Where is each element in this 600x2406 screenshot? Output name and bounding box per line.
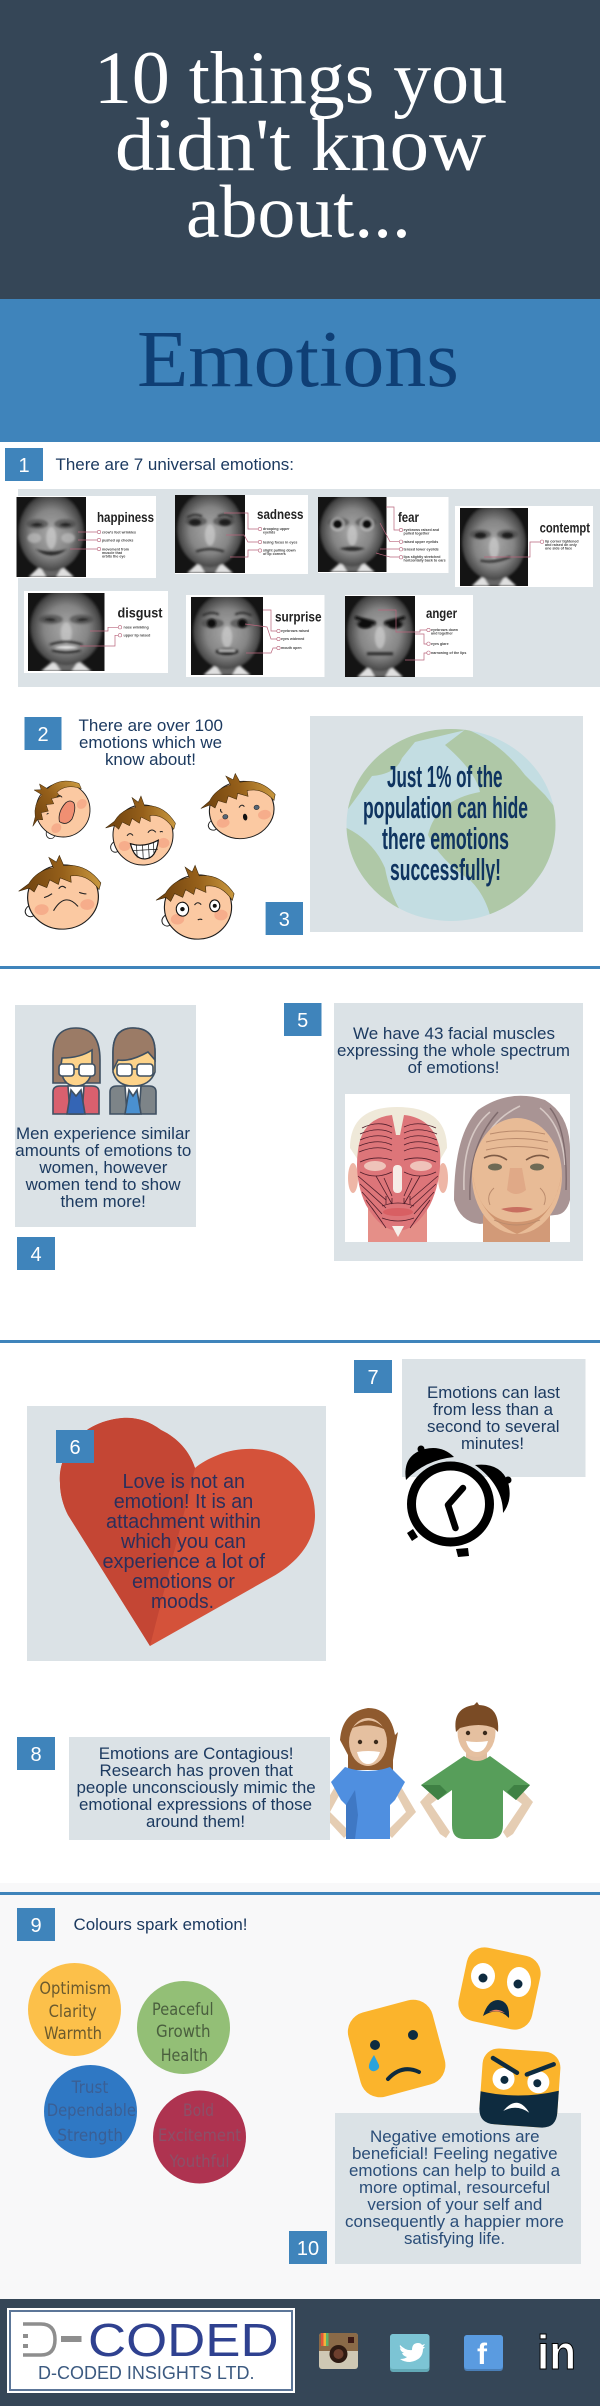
text: over 100 emotions: emotions which we bbox=[79, 733, 222, 752]
panel: love is not an emotion bbox=[27, 1406, 326, 1661]
text: negative emotions: satisfying life. bbox=[404, 2229, 505, 2248]
circle: red bbox=[153, 2090, 246, 2184]
icon: grinning boy bbox=[104, 794, 178, 867]
text: facial muscles bbox=[337, 1024, 570, 1077]
section 1: universal emotions bbox=[5, 448, 600, 687]
panel: negative emotions bbox=[335, 2113, 581, 2264]
card: sadness bbox=[175, 491, 308, 574]
card: fear: pulled together bbox=[404, 532, 430, 536]
text: duration: from less than a bbox=[433, 1400, 554, 1419]
icon: D mark bbox=[23, 2324, 82, 2355]
text: men and women: them more! bbox=[60, 1192, 146, 1211]
text: duration: second to several bbox=[427, 1417, 560, 1436]
card: fear: eyebrows raised and bbox=[404, 528, 439, 532]
number badge 10 bbox=[289, 2231, 327, 2264]
card: disgust: nose wrinkling bbox=[124, 626, 149, 630]
card: happiness: muscle that bbox=[102, 551, 123, 555]
text: love bbox=[102, 1471, 265, 1613]
icon: globe bbox=[346, 729, 556, 921]
text: love: Love is not an bbox=[122, 1471, 245, 1493]
card: fear: fear bbox=[398, 509, 419, 525]
circle: yellow: Clarity bbox=[49, 2002, 97, 2022]
title: 10 things you didn't know about: 10 things you bbox=[94, 37, 507, 120]
section 3: hide emotions bbox=[266, 715, 583, 935]
title: 10 things you didn't know about bbox=[94, 37, 507, 254]
text: love: moods. bbox=[151, 1591, 214, 1613]
number badge 10: 10 bbox=[297, 2238, 319, 2260]
number badge 8 bbox=[17, 1737, 55, 1770]
text: love: which you can bbox=[120, 1531, 246, 1553]
circle: green bbox=[137, 1981, 230, 2074]
card: anger bbox=[345, 592, 473, 677]
card: happiness: happiness bbox=[97, 509, 154, 525]
header: title band bbox=[0, 0, 600, 299]
footer bbox=[0, 2299, 600, 2406]
text: negative emotions: more optimal, resourceful bbox=[359, 2178, 550, 2197]
icon: linkedin: in bbox=[537, 2327, 576, 2380]
logo: D-CODED: D-CODED INSIGHTS LTD. bbox=[38, 2363, 254, 2383]
text: love: experience a lot of bbox=[102, 1551, 265, 1573]
card: sadness: sadness bbox=[257, 506, 304, 522]
text: contagious: Emotions are Contagious! bbox=[99, 1744, 294, 1763]
text: colours spark emotion: Colours spark emotion! bbox=[74, 1915, 248, 1934]
card: anger: narrowing of the lips bbox=[431, 651, 466, 655]
icon: man smiling bbox=[420, 1702, 533, 1839]
card: surprise: eyebrows raised bbox=[281, 629, 309, 633]
text: duration: minutes! bbox=[461, 1434, 524, 1453]
card: happiness: orbits the eye bbox=[102, 554, 125, 558]
icon: startled boy bbox=[154, 863, 237, 942]
number badge 9: 9 bbox=[30, 1915, 42, 1937]
panel: men and women bbox=[15, 1005, 196, 1227]
card: contempt: lip corner tightened bbox=[545, 540, 579, 544]
number badge 3 bbox=[266, 902, 303, 935]
old woman bbox=[454, 1096, 570, 1242]
text: just 1%: Just 1% of the bbox=[387, 759, 502, 794]
icon: sad boy bbox=[16, 852, 105, 933]
text: contagious: Research has proven that bbox=[100, 1761, 293, 1780]
circle: blue: Trust bbox=[71, 2078, 109, 2098]
icon: angry emoji bbox=[478, 2047, 561, 2129]
circle: blue: Strength bbox=[57, 2126, 123, 2146]
icon: facebook bbox=[464, 2335, 503, 2371]
icon: surprised boy bbox=[196, 767, 282, 845]
text: men and women: amounts of emotions to bbox=[15, 1141, 191, 1160]
number badge 3: 3 bbox=[279, 909, 290, 931]
circle: red: Youthful bbox=[169, 2152, 230, 2172]
section 9 and 10 background bbox=[0, 1883, 600, 2299]
icon: instagram bbox=[319, 2333, 358, 2369]
text: negative emotions: emotions can help to build a bbox=[349, 2161, 561, 2180]
panel: emotion faces bbox=[16, 489, 600, 687]
text: contagious: emotional expressions of those bbox=[79, 1795, 312, 1814]
text: duration bbox=[427, 1383, 560, 1453]
card: surprise bbox=[186, 593, 324, 677]
circle: red: Bold bbox=[183, 2101, 214, 2121]
text: over 100 emotions: There are over 100 bbox=[78, 716, 223, 735]
text: love: emotions or bbox=[132, 1571, 235, 1593]
card: sadness: of lip corners bbox=[263, 552, 286, 556]
text: over 100 emotions: know about! bbox=[105, 750, 196, 769]
card: happiness bbox=[16, 493, 156, 578]
card: contempt bbox=[455, 504, 593, 587]
text: 7 universal emotions: There are 7 universal emotions: bbox=[56, 455, 294, 474]
text: contagious: around them! bbox=[146, 1812, 245, 1831]
section 8: contagious bbox=[17, 1702, 533, 1840]
muscle face bbox=[348, 1107, 448, 1242]
circle: green: Health bbox=[161, 2046, 208, 2066]
card: disgust: disgust bbox=[118, 605, 163, 621]
section 10: negative emotions bbox=[289, 1944, 581, 2264]
image: muscle face and old woman bbox=[345, 1094, 570, 1242]
text: love: emotion! It is an bbox=[114, 1491, 253, 1513]
title: 10 things you didn't know about: didn't know bbox=[115, 104, 486, 187]
number badge 9 bbox=[17, 1908, 55, 1941]
panel: duration bbox=[402, 1359, 586, 1477]
icon: twitter bbox=[390, 2334, 430, 2372]
card: sadness: losing focus in eyes bbox=[263, 540, 297, 544]
card: disgust bbox=[24, 589, 168, 673]
text: negative emotions: version of your self and bbox=[367, 2195, 542, 2214]
number badge 2 bbox=[24, 717, 62, 750]
section 9: colours bbox=[17, 1908, 248, 2184]
card: happiness: crow's feet wrinkles bbox=[102, 530, 136, 534]
text: men and women: women, however bbox=[38, 1158, 168, 1177]
number badge 5 bbox=[284, 1003, 322, 1036]
text: contagious: people unconsciously mimic the bbox=[76, 1778, 316, 1797]
logo: D-CODED: CODED bbox=[88, 2314, 279, 2366]
panel: contagious bbox=[69, 1737, 330, 1840]
text: just 1%: there emotions bbox=[382, 821, 509, 856]
circle: blue bbox=[44, 2065, 137, 2158]
text: men and women bbox=[15, 1124, 191, 1211]
title: 10 things you didn't know about: about... bbox=[186, 171, 411, 254]
number badge 8: 8 bbox=[30, 1744, 42, 1766]
panel: facial muscles bbox=[334, 1003, 583, 1261]
circle: red: Excitement bbox=[158, 2126, 241, 2146]
card: disgust: upper lip raised bbox=[124, 634, 150, 638]
text: facial muscles: of emotions! bbox=[408, 1058, 499, 1077]
circle: green: Growth bbox=[156, 2022, 210, 2042]
text: negative emotions: Negative emotions are bbox=[370, 2127, 540, 2146]
icon: woman smiling bbox=[320, 1708, 416, 1839]
section 4: men and women bbox=[15, 1005, 196, 1270]
text: over 100 emotions bbox=[78, 716, 223, 769]
card: anger: eyebrows down bbox=[431, 628, 458, 632]
number badge 1 bbox=[5, 448, 43, 481]
text: negative emotions bbox=[345, 2127, 564, 2248]
card: fear: lips slightly stretched bbox=[404, 555, 440, 559]
circle: yellow: Warmth bbox=[44, 2024, 102, 2044]
card: sadness: eyelids bbox=[263, 530, 275, 534]
number badge 4: 4 bbox=[30, 1244, 42, 1266]
card: happiness: pushed up cheeks bbox=[102, 538, 133, 542]
card: surprise: mouth open bbox=[281, 646, 302, 650]
number badge 6: 6 bbox=[69, 1437, 81, 1459]
number badge 5: 5 bbox=[297, 1010, 308, 1032]
number badge 7 bbox=[354, 1360, 392, 1393]
text: negative emotions: beneficial! Feeling negative bbox=[352, 2144, 558, 2163]
text: just 1% bbox=[363, 759, 528, 887]
text: duration: Emotions can last bbox=[427, 1383, 560, 1402]
card: anger: eyes glare bbox=[431, 642, 449, 646]
card: contempt: and raised on only bbox=[545, 543, 577, 547]
card: contempt: one side of face bbox=[545, 546, 572, 550]
text: contagious bbox=[76, 1744, 316, 1831]
icon: man bbox=[110, 1028, 156, 1114]
number badge 7: 7 bbox=[367, 1367, 379, 1389]
number badge 2: 2 bbox=[37, 724, 49, 746]
heading: Emotions: Emotions bbox=[137, 314, 459, 404]
text: men and women: Men experience similar bbox=[16, 1124, 190, 1143]
circle: blue: Dependable bbox=[47, 2101, 136, 2121]
card: surprise: surprise bbox=[275, 609, 322, 625]
section 5: facial muscles bbox=[284, 1003, 583, 1261]
icon: shouting boy bbox=[15, 764, 103, 852]
number badge 4 bbox=[17, 1237, 55, 1270]
text: men and women: women tend to show bbox=[25, 1175, 181, 1194]
panel: globe bbox=[310, 715, 583, 932]
section 6: love bbox=[27, 1406, 326, 1661]
text: just 1%: successfully! bbox=[390, 852, 501, 887]
card: fear: tensed lower eyelids bbox=[404, 548, 439, 552]
icon: facebook: f bbox=[477, 2338, 488, 2371]
circle: green: Peaceful bbox=[152, 2000, 214, 2020]
number badge 1: 1 bbox=[18, 455, 30, 477]
card: fear: horizontally back to ears bbox=[404, 558, 446, 562]
card: sadness: slight pulling down bbox=[263, 548, 296, 552]
section 7: duration bbox=[354, 1359, 586, 1557]
header: Emotions band bbox=[0, 299, 600, 442]
icon: scared emoji bbox=[455, 1944, 544, 2033]
card: sadness: drooping upper bbox=[263, 527, 290, 531]
card: fear: raised upper eyelids bbox=[404, 540, 438, 544]
card: fear bbox=[318, 493, 448, 573]
icon: alarm clock bbox=[405, 1446, 512, 1557]
circle: yellow bbox=[28, 1963, 121, 2056]
text: love: attachment within bbox=[106, 1511, 261, 1533]
text: facial muscles: expressing the whole spectrum bbox=[337, 1041, 570, 1060]
card: anger: anger bbox=[426, 605, 457, 621]
circle: yellow: Optimism bbox=[39, 1979, 111, 1999]
text: facial muscles: We have 43 facial muscles bbox=[353, 1024, 555, 1043]
icon: heart bbox=[60, 1418, 315, 1646]
card: happiness: movement from bbox=[102, 548, 129, 552]
card: anger: and together bbox=[431, 632, 453, 636]
logo: D-CODED bbox=[7, 2308, 295, 2393]
text: negative emotions: consequently a happier more bbox=[345, 2212, 564, 2231]
number badge 6 bbox=[56, 1430, 94, 1463]
section 2: over 100 emotions bbox=[15, 716, 282, 942]
icon: woman bbox=[53, 1028, 100, 1114]
icon: crying emoji bbox=[343, 1995, 450, 2102]
card: surprise: eyes widened bbox=[281, 637, 304, 641]
